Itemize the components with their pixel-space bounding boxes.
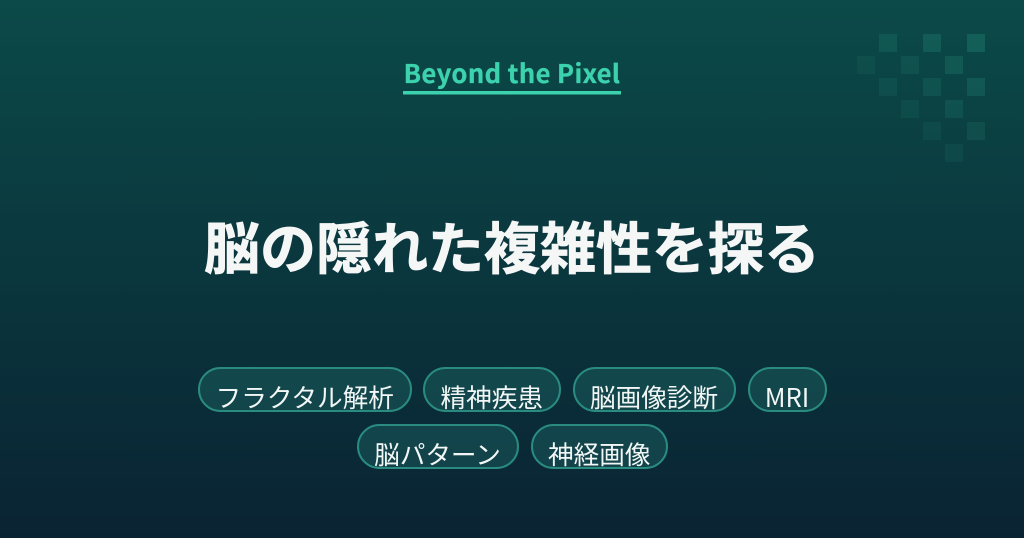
tag: MRI [748,367,826,412]
brand underline [403,91,621,94]
tag: フラクタル解析 [198,367,412,412]
title: 脳の隠れた複雑性を探る [204,205,820,286]
decorative pixel grid [857,34,985,162]
tag: 脳画像診断 [572,367,736,412]
brand label: Beyond the Pixel: Beyond the Pixel [404,54,620,91]
tag: 神経画像 [530,424,668,469]
tag: 精神疾患 [423,367,560,412]
tag: 脳パターン [356,424,518,469]
